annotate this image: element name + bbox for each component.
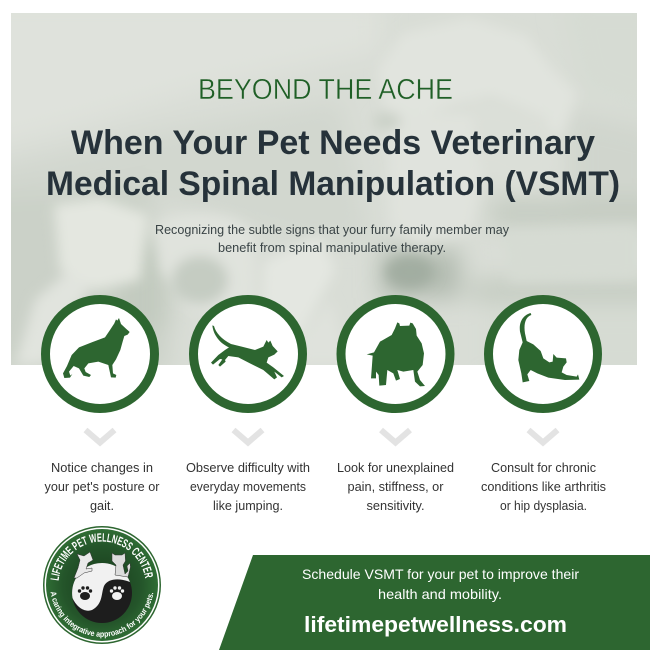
step text: sensitivity. [366, 499, 424, 513]
website: lifetimepetwellness.com [304, 612, 567, 637]
step text [481, 461, 606, 513]
title [46, 124, 620, 203]
step text: Look for unexplained [337, 461, 454, 475]
panel: blurred dog photo background [11, 13, 637, 365]
icon ring: bulldog [341, 300, 450, 408]
call to action banner [219, 555, 650, 650]
icon: black paw [78, 586, 92, 600]
banner text: health and mobility. [378, 586, 502, 602]
step text [186, 461, 310, 513]
step text [44, 461, 160, 513]
title: Medical Spinal Manipulation (VSMT) [46, 165, 620, 203]
step 3: pain [337, 300, 454, 513]
chevron [234, 430, 262, 442]
icon ring: jumping cat [194, 300, 302, 408]
title: When Your Pet Needs Veterinary [71, 124, 595, 162]
yin-yang [72, 563, 132, 623]
icon ring: german shepherd [46, 300, 154, 408]
logo: Lifetime Pet Wellness Center [43, 526, 161, 644]
step text: Consult for chronic [491, 461, 596, 475]
step text: conditions like arthritis [481, 480, 606, 494]
banner text [302, 566, 579, 602]
step text [337, 461, 454, 513]
intro text: Recognizing the subtle signs that your furry family member may [155, 223, 510, 237]
step 4: chronic conditions [481, 300, 606, 513]
step text: Notice changes in [51, 461, 153, 475]
step text: like jumping. [213, 499, 283, 513]
step text: Observe difficulty with [186, 461, 310, 475]
step text: everyday movements [190, 480, 306, 494]
intro text: benefit from spinal manipulative therapy. [218, 241, 446, 255]
eyebrow heading: BEYOND THE ACHE [198, 74, 453, 106]
step 1: posture [44, 300, 160, 513]
logo name: LIFETIME PET WELLNESS CENTER [50, 533, 153, 580]
chevron [381, 430, 410, 442]
step text: your pet's posture or [44, 480, 160, 494]
icon: logo cat [112, 553, 130, 577]
intro text [155, 223, 510, 255]
step text: or hip dysplasia. [500, 499, 587, 513]
logo tagline: A caring integrative approach for your pets. [50, 592, 154, 638]
banner text: Schedule VSMT for your pet to improve their [302, 566, 579, 582]
step 2: movement [186, 300, 310, 513]
icon: logo dog [74, 552, 93, 578]
chevron [528, 430, 558, 442]
step text: pain, stiffness, or [348, 480, 444, 494]
icon ring: stretching cat [488, 300, 598, 408]
chevron [86, 430, 114, 442]
step text: gait. [90, 499, 114, 513]
icon: white paw [110, 586, 124, 600]
